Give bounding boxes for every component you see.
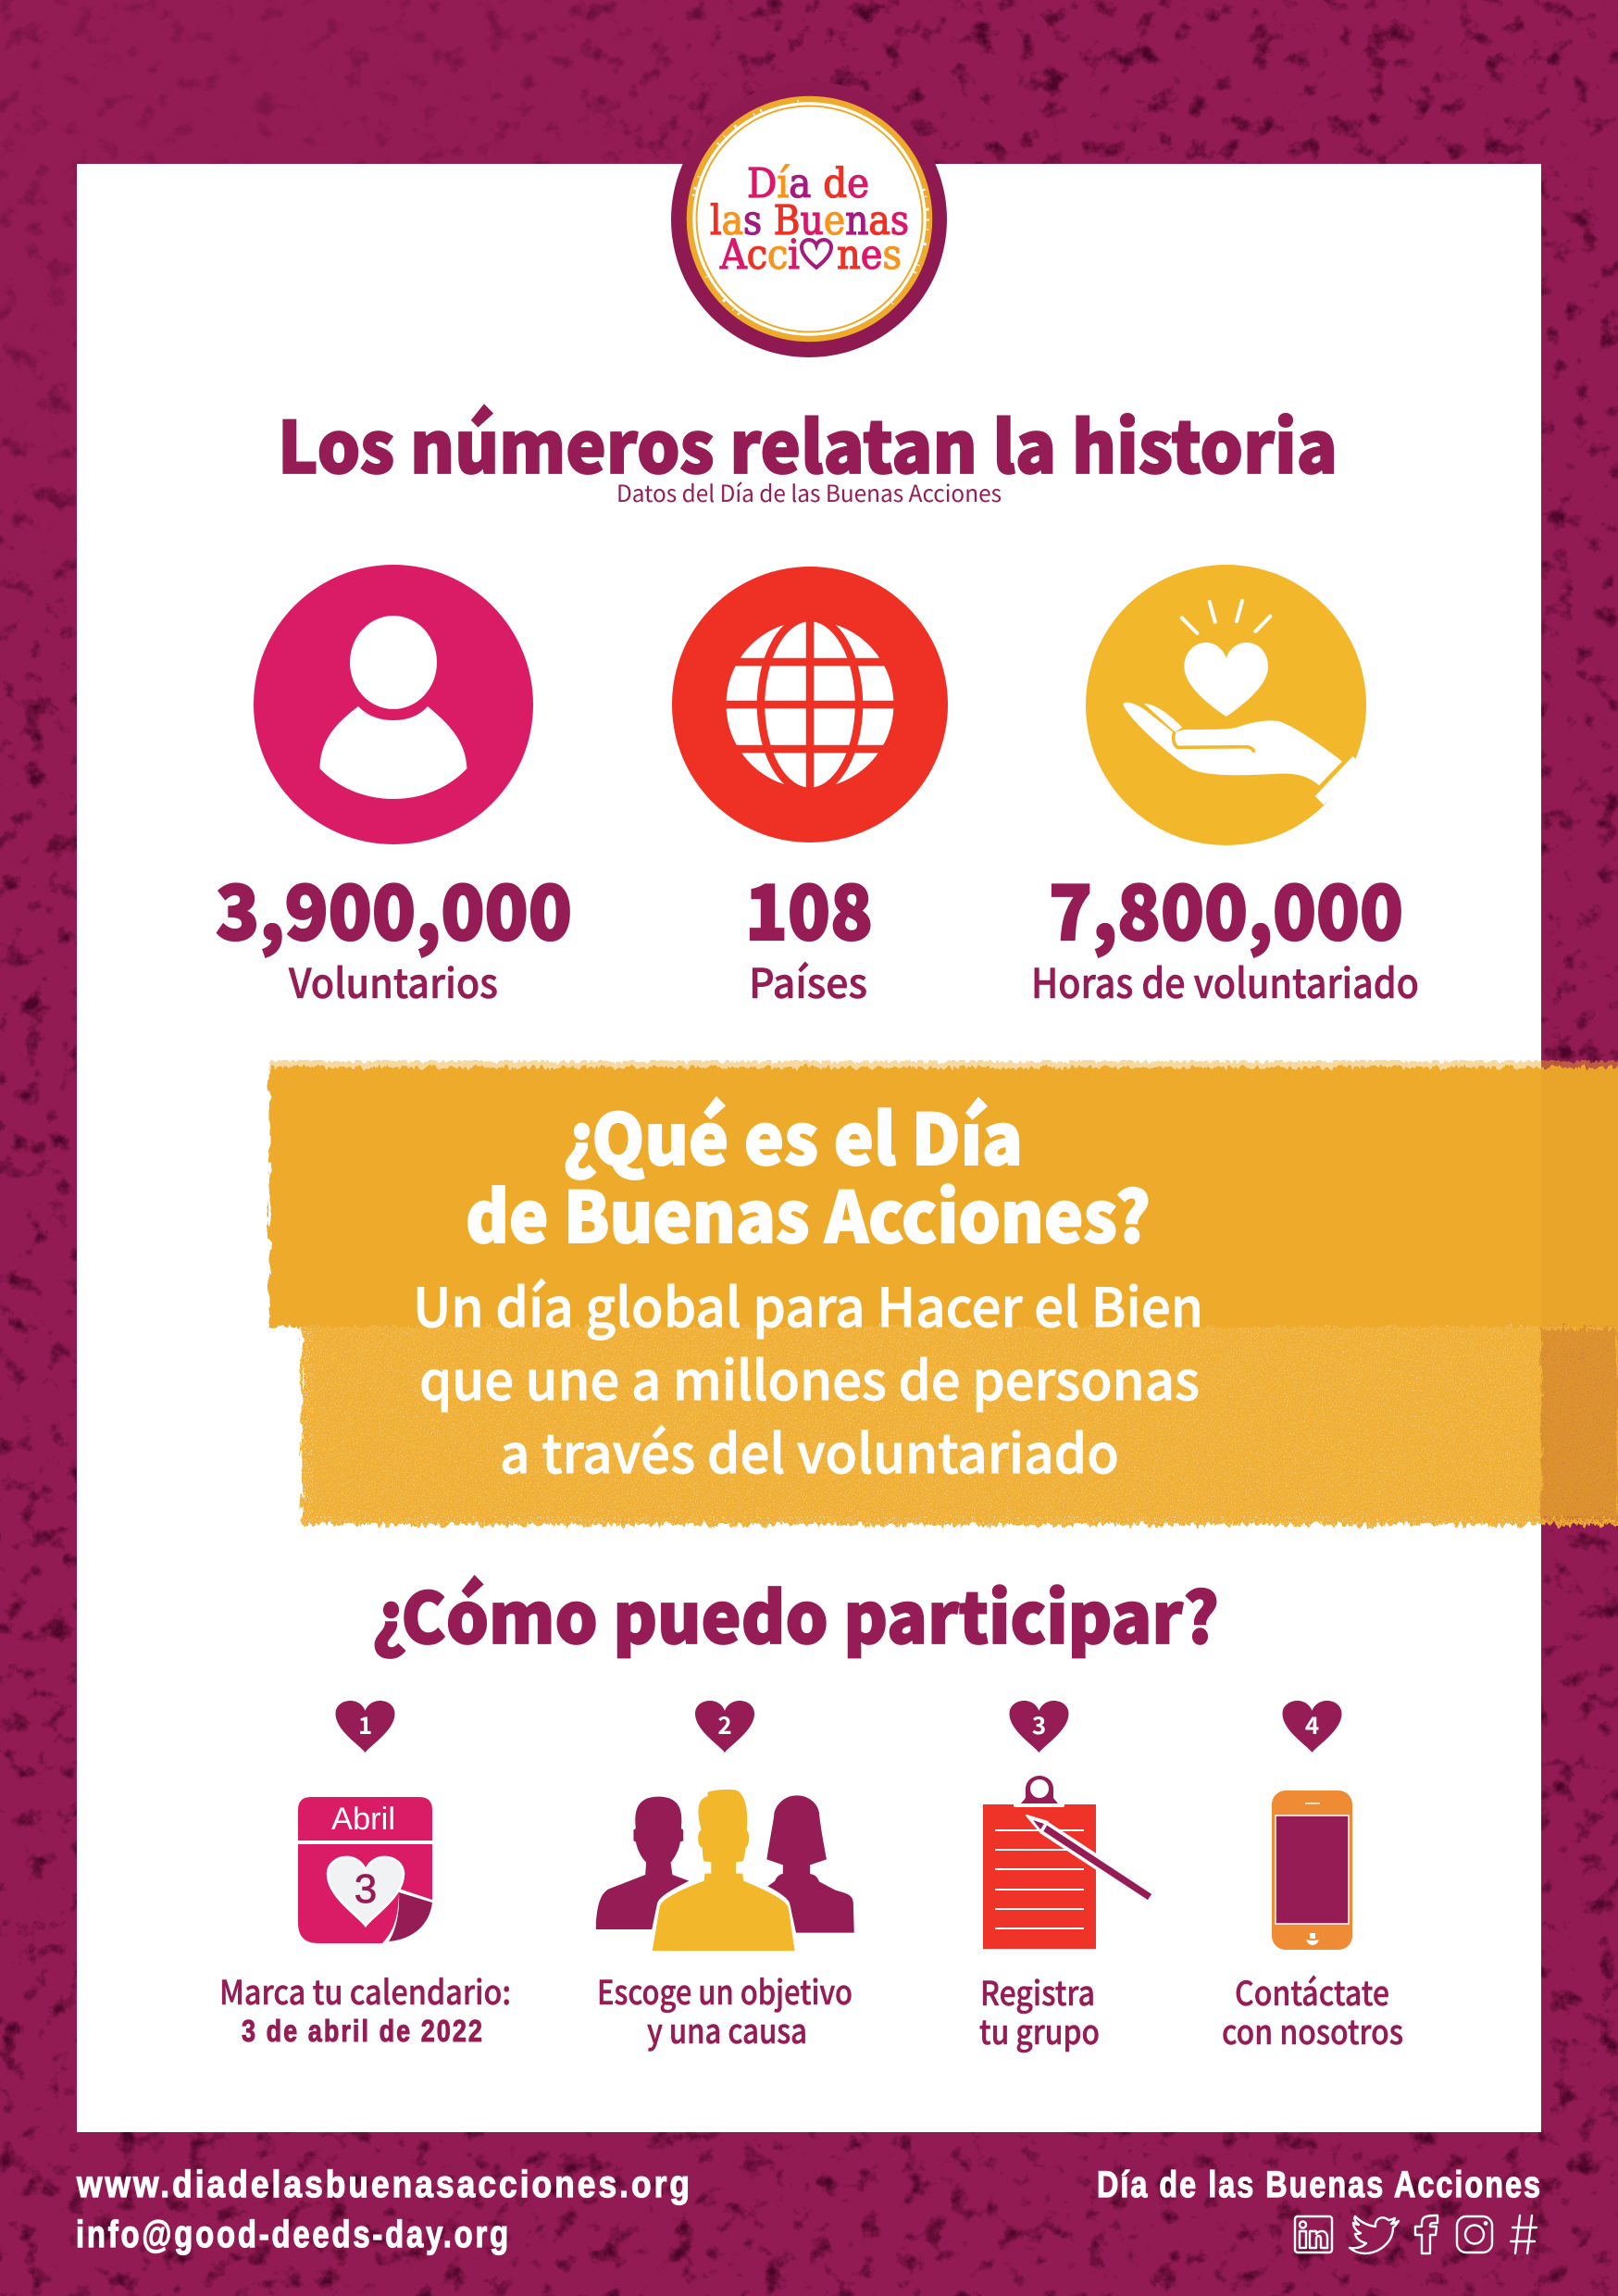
icon: calendar: 3 xyxy=(355,1866,377,1912)
icon: instagram xyxy=(1457,2216,1492,2252)
stat: volunteers xyxy=(216,565,572,1010)
heading: what is the day: ¿Qué es el Día xyxy=(563,1083,1023,1185)
icon: calendar: Abril xyxy=(331,1802,395,1837)
heart number 4 xyxy=(1283,1701,1342,1753)
icon: twitter xyxy=(1350,2216,1399,2253)
logo heart xyxy=(802,240,831,268)
social icons xyxy=(1295,2215,1537,2253)
title: Los números relatan la historia xyxy=(278,392,1338,494)
icon: clipboard and pencil xyxy=(983,1776,1150,1949)
heart number 1: 1 xyxy=(358,1707,372,1741)
logo text: Día de: Día de xyxy=(747,160,869,207)
caption line 2: con nosotros xyxy=(1222,2006,1403,2054)
caption line 1: Registra xyxy=(980,1967,1095,2015)
icon: linkedin xyxy=(1295,2216,1332,2252)
heart number 2 xyxy=(695,1701,754,1753)
number: 7,800,000 xyxy=(1049,852,1403,962)
step 1: calendar xyxy=(219,1701,511,2048)
panel: white card xyxy=(77,164,1541,2132)
caption date: 3 de abril de 2022 xyxy=(242,2014,484,2048)
icon: phone xyxy=(1272,1791,1352,1950)
step 4: contact xyxy=(1222,1701,1403,2054)
heart number 1 xyxy=(335,1701,394,1753)
caption line 2: tu grupo xyxy=(979,2006,1100,2054)
logo text: nes: nes xyxy=(837,231,902,279)
label: Horas de voluntariado xyxy=(1031,951,1419,1010)
heart number 4: 4 xyxy=(1305,1707,1319,1741)
heart number 3: 3 xyxy=(1032,1707,1046,1741)
icon: hand with heart xyxy=(1086,565,1366,845)
description line 2: que une a millones de personas xyxy=(419,1338,1200,1416)
number: 3,900,000 xyxy=(216,852,572,962)
heart number 3 xyxy=(1009,1701,1068,1753)
label: Países xyxy=(749,951,867,1010)
caption line 1: Marca tu calendario: xyxy=(219,1966,511,2015)
number: 108 xyxy=(745,852,873,962)
label: Voluntarios xyxy=(288,951,498,1010)
stat: countries xyxy=(672,567,948,1010)
heading: how to participate: ¿Cómo puedo participar? xyxy=(372,1562,1219,1664)
step 3: register xyxy=(979,1701,1150,2054)
logo badge xyxy=(671,81,947,357)
caption line 2: y una causa xyxy=(647,2005,807,2053)
description line 3: a través del voluntariado xyxy=(500,1411,1119,1489)
stat: volunteer hours xyxy=(1031,565,1419,1010)
icon: person xyxy=(254,565,533,844)
caption line 1: Escoge un objetivo xyxy=(597,1966,853,2015)
icon: facebook xyxy=(1415,2215,1438,2253)
panel: brushed yellow band xyxy=(268,1061,1618,1525)
logo text: las Buenas: las Buenas xyxy=(710,197,909,244)
icon: hashtag xyxy=(1511,2215,1537,2253)
logo text: Acci: Acci xyxy=(719,231,800,279)
footer: email: info@good-deeds-day.org xyxy=(76,2213,511,2255)
heart number 2: 2 xyxy=(717,1707,732,1741)
caption line 1: Contáctate xyxy=(1235,1967,1389,2015)
icon: three people xyxy=(596,1789,854,1952)
step 2: group xyxy=(596,1701,854,2053)
icon: globe xyxy=(672,567,948,842)
footer: website: www.diadelasbuenasacciones.org xyxy=(76,2163,692,2205)
icon: calendar xyxy=(298,1797,432,1943)
description line 1: Un día global para Hacer el Bien xyxy=(413,1265,1203,1342)
heading line 2: de Buenas Acciones? xyxy=(466,1161,1151,1263)
subtitle: Datos del Día de las Buenas Acciones xyxy=(616,476,1002,509)
